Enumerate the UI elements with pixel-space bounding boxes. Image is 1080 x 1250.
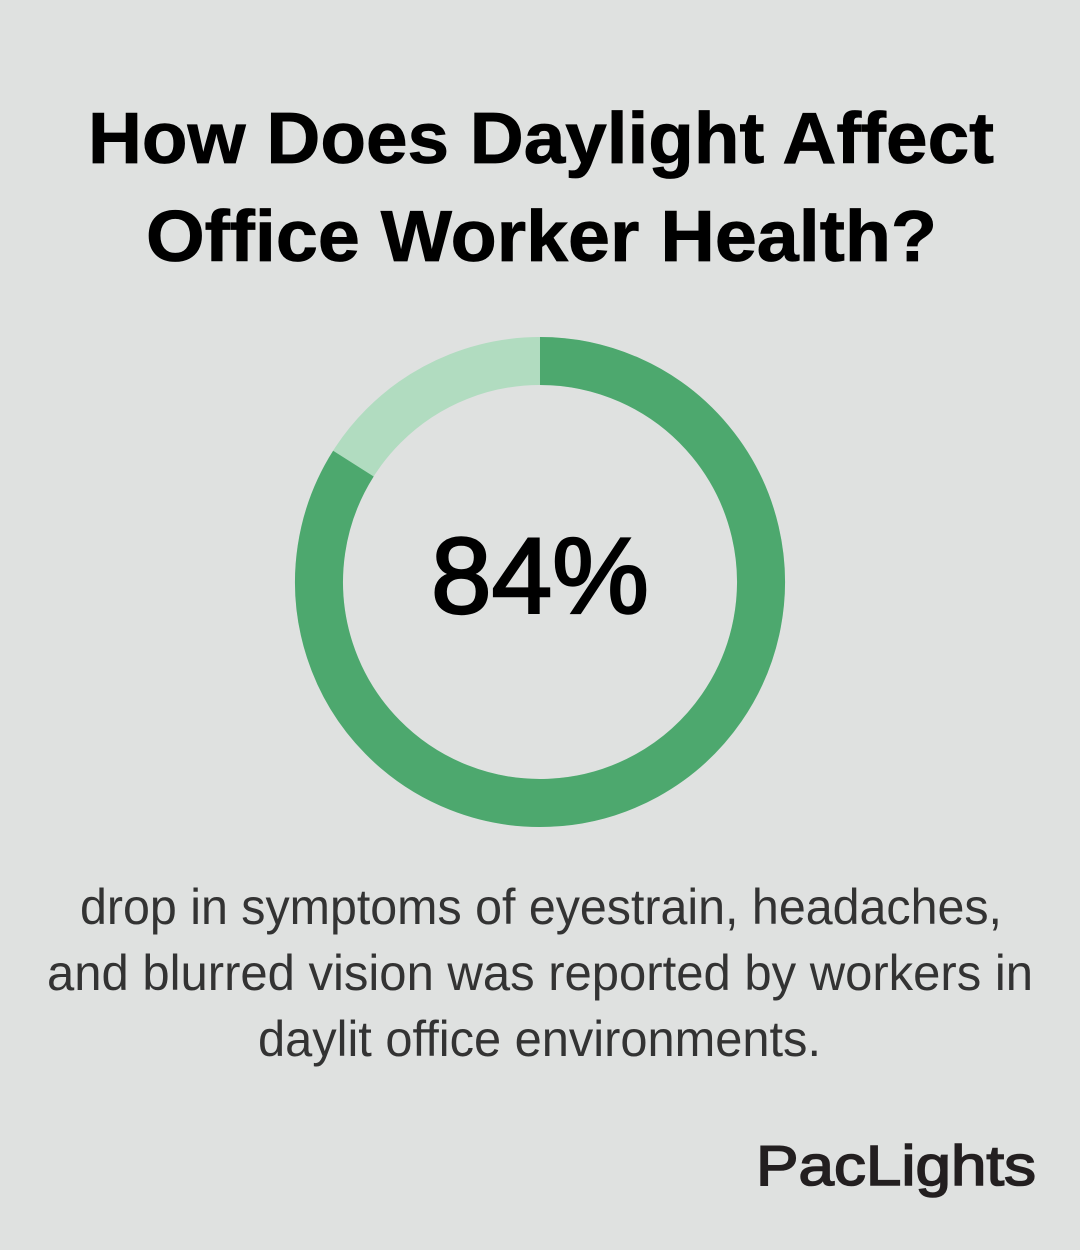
remaining 16% segment <box>319 361 761 803</box>
title <box>88 99 994 277</box>
description text: and blurred vision was reported by workers in <box>47 945 1033 1001</box>
title: Office Worker Health? <box>146 197 937 277</box>
logo: PacLights: PacLights <box>756 1134 1036 1198</box>
description text <box>47 879 1033 1067</box>
big number: 84% <box>431 515 649 636</box>
description text: daylit office environments. <box>258 1011 821 1067</box>
description text: drop in symptoms of eyestrain, headaches, <box>80 879 1002 935</box>
highlighted 84% segment <box>319 361 761 803</box>
title: How Does Daylight Affect <box>88 99 994 179</box>
donut chart: 84% <box>319 361 761 803</box>
